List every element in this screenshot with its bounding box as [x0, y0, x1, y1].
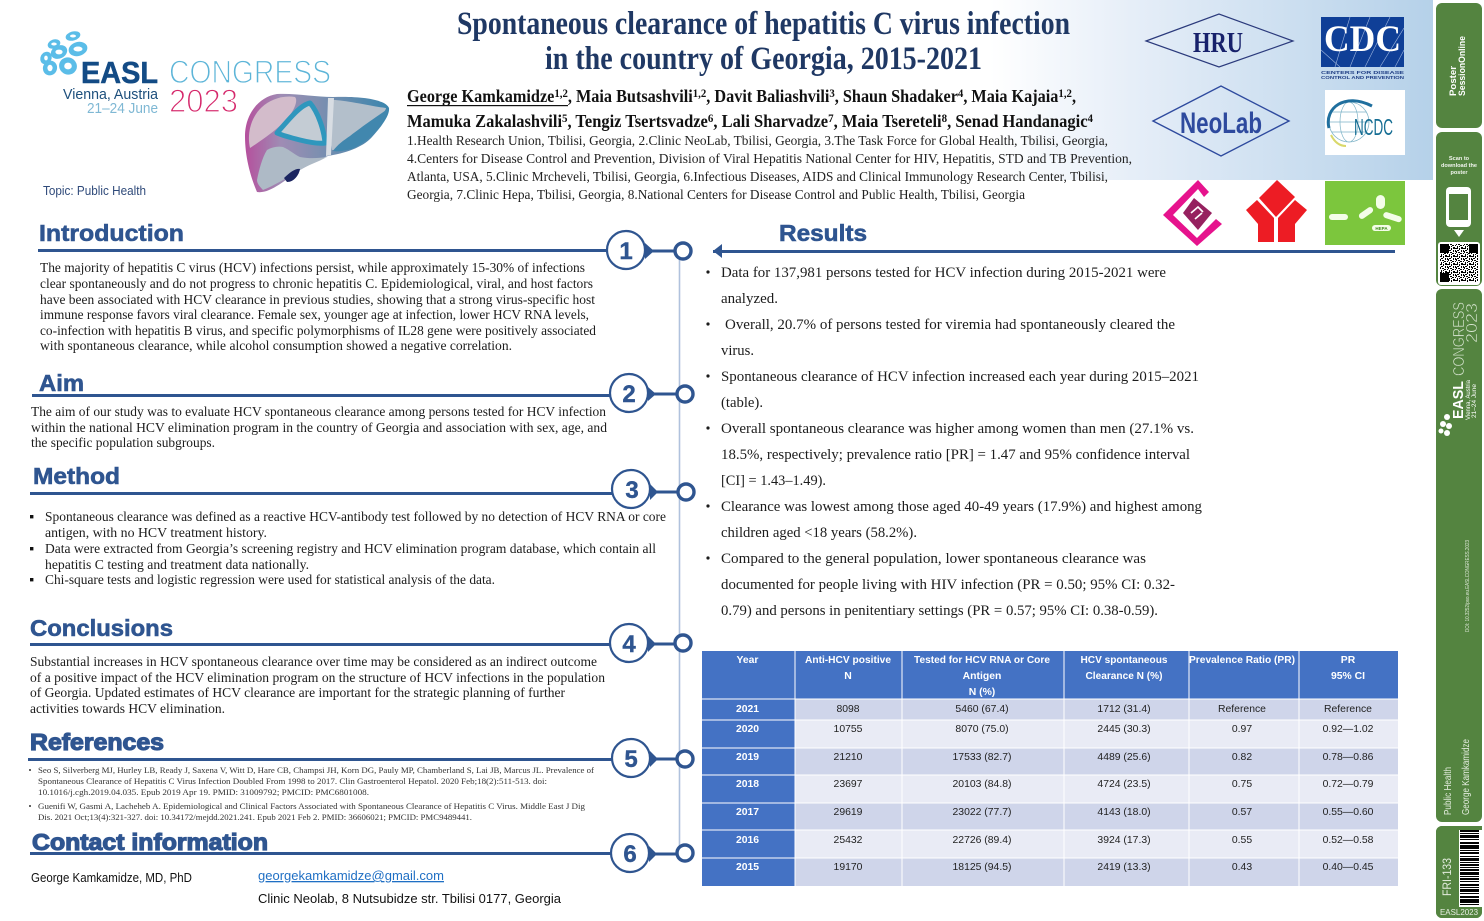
text: references [29, 765, 594, 822]
table body: 0.92—1.02 [1323, 724, 1374, 735]
EASL Congress logo: 2023 [169, 83, 238, 119]
text: references: Seo S, Silverberg MJ, Hurley LB, Ready J, Saxena V, Witt D, Hare CB, Champsi JH, Korn DG, Pauly MP, Chamberland S, Lai JB, Marcus JL. Prevalence of [38, 765, 594, 775]
table body: 2018 [736, 779, 759, 790]
logo: Hepa: HEPA [1375, 226, 1388, 231]
marker 6 [611, 834, 693, 872]
icon: phone [1446, 187, 1471, 237]
marker 5: 5 [624, 746, 638, 773]
table body: 17533 (82.7) [953, 752, 1011, 763]
topic label: Topic: Public Health [43, 184, 146, 198]
authors: 3 [829, 86, 835, 100]
EASL Congress logo [38, 30, 331, 119]
text: aim: within the national HCV elimination program in the country of Georgia and association with sex, age, and [31, 420, 607, 435]
sidebar: congress band: Vienna, Austria [1465, 380, 1472, 420]
text: conclusions [30, 654, 605, 716]
table body: 0.55 [1232, 835, 1252, 846]
authors [407, 86, 1093, 131]
table body: 23697 [834, 779, 863, 790]
table body: 0.82 [1232, 752, 1252, 763]
sidebar: barcode ID: EASL2023 [1440, 908, 1479, 917]
authors: Mamuka Zakalashvili [407, 111, 577, 131]
text: results bullets: Compared to the general population, lower spontaneous clearance was [721, 551, 1146, 567]
table header: 95% CI [1331, 671, 1365, 682]
marker 4 [610, 624, 691, 662]
authors: 8 [942, 111, 947, 125]
text: results bullets: Overall, 20.7% of persons tested for viremia had spontaneously cleared the [725, 317, 1175, 333]
sidebar: congress band: EASL [1450, 381, 1467, 419]
marker 1 [607, 231, 691, 269]
timeline vertical connector [678, 251, 680, 853]
table body: 22726 (89.4) [953, 835, 1011, 846]
authors: 6 [708, 111, 713, 125]
heading: Aim [32, 370, 610, 397]
text: conclusions: of a positive impact of the HCV elimination program on the structure of HCV infections in the population [30, 670, 605, 685]
authors: 4 [958, 86, 963, 100]
table body: 2445 (30.3) [1097, 724, 1151, 735]
table body: 5460 (67.4) [955, 704, 1009, 715]
sidebar: congress band: 21–24 June [1471, 384, 1478, 418]
logo: NCDC: NCDC [1354, 114, 1393, 140]
logo: CDC: CONTROL AND PREVENTION [1321, 75, 1404, 80]
text: results bullets: children aged <18 years (58.2%). [721, 525, 917, 541]
marker 3: 3 [625, 477, 639, 504]
marker 2 [610, 374, 693, 412]
contact details: Clinic Neolab, 8 Nutsubidze str. Tbilisi 0177, Georgia [258, 891, 562, 906]
heading: Method [30, 463, 612, 495]
heading: Contact information: Contact information [32, 829, 268, 855]
table body: 2019 [736, 752, 759, 763]
logo: HRU: HRU [1193, 27, 1243, 59]
sidebar: congress band [1436, 289, 1482, 822]
table header: Clearance N (%) [1086, 671, 1162, 682]
authors: , Maia Tsereteli [834, 111, 942, 131]
heading: Introduction [38, 220, 608, 252]
text: references: 10.1016/j.cgh.2019.04.035. Epub 2019 Apr 19. PMID: 31009792; PMCID: PMC6801008. [38, 787, 369, 797]
authors: , Senad Handanagic [947, 111, 1088, 131]
text: results bullets: [CI] = 1.43–1.49). [721, 473, 826, 489]
sidebar: congress band: 2023 [1464, 303, 1481, 343]
text: method [30, 509, 666, 587]
table body: 0.55—0.60 [1323, 807, 1374, 818]
table header: HCV spontaneous [1080, 655, 1168, 666]
heading: Conclusions: Conclusions [30, 615, 173, 641]
sidebar: poster session online [1436, 3, 1482, 128]
text: introduction [40, 260, 596, 353]
text: results bullets: Clearance was lowest among those aged 40-49 years (17.9%) and highest among [721, 499, 1202, 515]
table body: 0.52—0.58 [1323, 835, 1374, 846]
logo: NeoLab [1153, 86, 1289, 156]
table body: 4724 (23.5) [1097, 779, 1151, 790]
table header [737, 655, 1365, 698]
authors: , Davit Baliashvili [706, 86, 829, 106]
text: results bullets: Overall spontaneous clearance was higher among women than men (27.1% vs. [721, 421, 1194, 437]
text: method: Spontaneous clearance was defined as a reactive HCV-antibody test followed by no detection of HCV RNA or core [45, 509, 666, 524]
heading: Results: Results [779, 220, 867, 246]
table header: N (%) [969, 687, 995, 698]
text: results bullets: Data for 137,981 persons tested for HCV infection during 2015-2021 were [721, 265, 1166, 281]
logo: CDC: CDC [1324, 19, 1401, 60]
table header: Tested for HCV RNA or Core [914, 655, 1050, 666]
table body: 2015 [736, 862, 759, 873]
text: results bullets [706, 265, 1202, 619]
text: conclusions: Substantial increases in HCV spontaneous clearance over time may be considered as an indirect outcome [30, 654, 597, 669]
logo: pink diamond [1163, 180, 1222, 246]
text: method: antigen, with no HCV treatment history. [45, 525, 267, 540]
authors: , Tengiz Tsertsvadze [568, 111, 708, 131]
logo: CDC [1321, 17, 1404, 80]
QR code [1438, 242, 1480, 285]
affiliations: Georgia, 7.Clinic Hepa, Tbilisi, Georgia, 8.National Centers for Disease Control and Public Health, Tbilisi, Georgia [407, 187, 1025, 202]
text: conclusions: activities towards HCV elimination. [30, 701, 225, 716]
table header: Antigen [963, 671, 1001, 682]
table body: 29619 [834, 807, 863, 818]
affiliations: 4.Centers for Disease Control and Prevention, Division of Viral Hepatitis National Center for HIV, Hepatitis, STD and TB Prevention, [407, 151, 1132, 166]
text: results bullets: 18.5%, respectively; prevalence ratio [PR] = 1.47 and 95% confidence interval [721, 447, 1190, 463]
text: introduction: with spontaneous clearance, while alcohol consumption showed a negative correlation. [40, 338, 512, 353]
table body: 25432 [834, 835, 863, 846]
text: results bullets: (table). [721, 395, 763, 411]
title: in the country of Georgia, 2015-2021 [545, 41, 982, 77]
title [457, 6, 1070, 77]
contact details: georgekamkamidze@gmail.com [258, 868, 444, 883]
table body: 0.78—0.86 [1323, 752, 1374, 763]
heading: Conclusions [30, 615, 610, 646]
sidebar: congress band: CONGRESS [1451, 302, 1468, 376]
icon: hexagon cluster [38, 30, 89, 78]
authors: 7 [828, 111, 834, 125]
table body: 0.75 [1232, 779, 1252, 790]
sidebar: barcode ID: FRI-133 [1440, 858, 1454, 896]
heading: Introduction: Introduction [39, 220, 184, 246]
sidebar: barcode ID [1436, 826, 1482, 918]
text: references: Spontaneous Clearance of Hepatitis C Virus Infection Doubled From 1998 to 2017. Clin Gastroenterol Hepatol. 2020 Feb;18(2):511-513. doi: [38, 776, 547, 786]
logo: NeoLab: NeoLab [1180, 107, 1262, 140]
heading: Results [713, 220, 1395, 258]
table body: 2017 [736, 807, 759, 818]
text: aim: The aim of our study was to evaluate HCV spontaneous clearance among persons tested for HCV infection [31, 404, 606, 419]
authors: 5 [562, 111, 568, 125]
table body: 4489 (25.6) [1097, 752, 1151, 763]
sidebar: scan to download: poster [1450, 170, 1468, 176]
table header: Prevalence Ratio (PR) [1189, 655, 1295, 666]
text: aim [31, 404, 607, 450]
table body: 2021 [736, 704, 759, 715]
table body: 4143 (18.0) [1097, 807, 1151, 818]
authors: 4 [1088, 111, 1093, 125]
text: introduction: have been associated with HCV clearance in previous studies, showing that a strong virus-specific host [40, 292, 595, 307]
contact details [31, 868, 562, 906]
table body: 10755 [834, 724, 863, 735]
marker 3 [612, 470, 694, 508]
authors: , Shaun Shadaker [835, 86, 958, 106]
authors: , Lali Sharvadze [713, 111, 828, 131]
marker 6: 6 [623, 841, 637, 868]
heading: References: References [30, 729, 164, 755]
affiliations [407, 133, 1132, 202]
authors: George Kamkamidze [407, 86, 570, 106]
heading: Method: Method [33, 463, 120, 489]
sidebar: congress band: DOI: 10.3252/pso.eu.EASLCONGRESS.2023 [1465, 540, 1471, 632]
text: results bullets: analyzed. [721, 291, 778, 307]
authors: 1,2 [554, 86, 568, 100]
EASL Congress logo: Vienna, Austria [63, 87, 159, 103]
marker 5 [612, 739, 693, 777]
liver illustration [245, 94, 389, 192]
EASL Congress logo: CONGRESS [169, 54, 331, 90]
EASL Congress logo: 21–24 June [87, 101, 158, 117]
sidebar: scan to download: download the [1441, 163, 1477, 169]
sidebar: poster session online: Poster [1448, 65, 1458, 96]
affiliations: 1.Health Research Union, Tbilisi, Georgia, 2.Clinic NeoLab, Tbilisi, Georgia, 3.The Task Force for Global Health, Tbilisi, Georgia, [407, 133, 1108, 148]
table body: 8070 (75.0) [955, 724, 1009, 735]
heading: Contact information [30, 829, 612, 855]
table body [736, 704, 1374, 873]
results table [702, 651, 1398, 886]
table body: Reference [1324, 704, 1372, 715]
title: Spontaneous clearance of hepatitis C virus infection [457, 6, 1070, 42]
table header: PR [1341, 655, 1356, 666]
sidebar: congress band: Public Health [1442, 767, 1454, 815]
marker 1: 1 [619, 238, 633, 265]
logo: HRU [1146, 14, 1293, 67]
table body: 8098 [836, 704, 860, 715]
contact details: George Kamkamidze, MD, PhD [31, 870, 192, 885]
table body: 2419 (13.3) [1097, 862, 1151, 873]
table body: 0.72—0.79 [1323, 779, 1374, 790]
sidebar: congress band: George Kamkamidze [1460, 739, 1472, 815]
logo: NCDC [1325, 90, 1405, 155]
text: method: Chi-square tests and logistic regression were used for statistical analysis of the data. [45, 572, 495, 587]
table body: 2020 [736, 724, 759, 735]
marker 4: 4 [622, 631, 636, 658]
text: results bullets: virus. [721, 343, 754, 359]
authors: 1,2 [1058, 86, 1072, 100]
table header: N [844, 671, 852, 682]
header gradient background [990, 0, 1433, 180]
table body: Reference [1218, 704, 1266, 715]
authors: , [1072, 86, 1076, 106]
table body: 0.97 [1232, 724, 1252, 735]
table body: 0.43 [1232, 862, 1252, 873]
text: introduction: The majority of hepatitis C virus (HCV) infections persist, while approximately 15-30% of infections [40, 260, 585, 275]
marker 2: 2 [622, 381, 636, 408]
table body: 19170 [834, 862, 863, 873]
sidebar: scan to download [1436, 132, 1482, 286]
text: references: Dis. 2021 Oct;13(4):321-327. doi: 10.34172/mejdd.2021.241. Epub 2021 Feb 2. PMID: 36606021; PMCID: PMC9489441. [38, 812, 472, 822]
table body: 0.40—0.45 [1323, 862, 1374, 873]
text: references: Guenifi W, Gasmi A, Lacheheb A. Epidemiological and Clinical Factors Associated with Spontaneous Clearance of Hepatitis C Virus. Middle East J Dig [38, 801, 586, 811]
logo: CDC: CENTERS FOR DISEASE [1321, 70, 1404, 75]
text: introduction: immune response favors viral clearance. Female sex, younger age at infection, lower HCV RNA levels, [40, 307, 589, 322]
table body: 1712 (31.4) [1097, 704, 1151, 715]
text: results bullets: 0.79) and persons in penitentiary settings (PR = 0.57; 95% CI: 0.38-0.59). [721, 603, 1158, 619]
text: aim: the specific population subgroups. [31, 435, 215, 450]
text: introduction: co-infection with hepatitis B virus, and specific polymorphisms of IL28 gene were positively associated [40, 323, 596, 338]
text: method: Data were extracted from Georgia’s screening registry and HCV elimination program database, which contain all [45, 541, 656, 556]
table body: 21210 [834, 752, 863, 763]
table header: Anti-HCV positive [805, 655, 891, 666]
text: results bullets: documented for people living with HIV infection (PR = 0.50; 95% CI: 0.32- [721, 577, 1175, 593]
authors: , Maia Butsashvili [568, 86, 693, 106]
logo: Hepa [1325, 181, 1405, 245]
sidebar: scan to download: Scan to [1449, 156, 1470, 162]
table body: 18125 (94.5) [953, 862, 1011, 873]
EASL Congress logo: EASL [81, 55, 158, 90]
table body: 2016 [736, 835, 759, 846]
table body: 20103 (84.8) [953, 779, 1011, 790]
table body: 23022 (77.7) [953, 807, 1011, 818]
text: method: hepatitis C testing and treatment data nationally. [45, 557, 309, 572]
heading: Aim: Aim [39, 370, 84, 396]
table header: Year [737, 655, 758, 666]
table body: 0.57 [1232, 807, 1252, 818]
text: introduction: clear spontaneously and do not progress to chronic hepatitis C. Epidemiological, viral, and host factors [40, 276, 593, 291]
text: results bullets: Spontaneous clearance of HCV infection increased each year during 2015–2021 [721, 369, 1199, 385]
authors: , Maia Kajaia [963, 86, 1058, 106]
affiliations: Atlanta, USA, 5.Clinic Mrcheveli, Tbilisi, Georgia, 6.Infectious Diseases, AIDS and Clinical Immunology Research Center, Tbilisi, [407, 169, 1108, 184]
text: conclusions: of Georgia. Updated estimates of HCV clearance are important for the strategic planning of further [30, 685, 566, 700]
sidebar: poster session online: SessionOnline [1457, 36, 1467, 96]
authors: 1,2 [693, 86, 706, 100]
logo: red house [1246, 180, 1307, 242]
table body: 3924 (17.3) [1097, 835, 1151, 846]
heading: References [28, 729, 612, 761]
